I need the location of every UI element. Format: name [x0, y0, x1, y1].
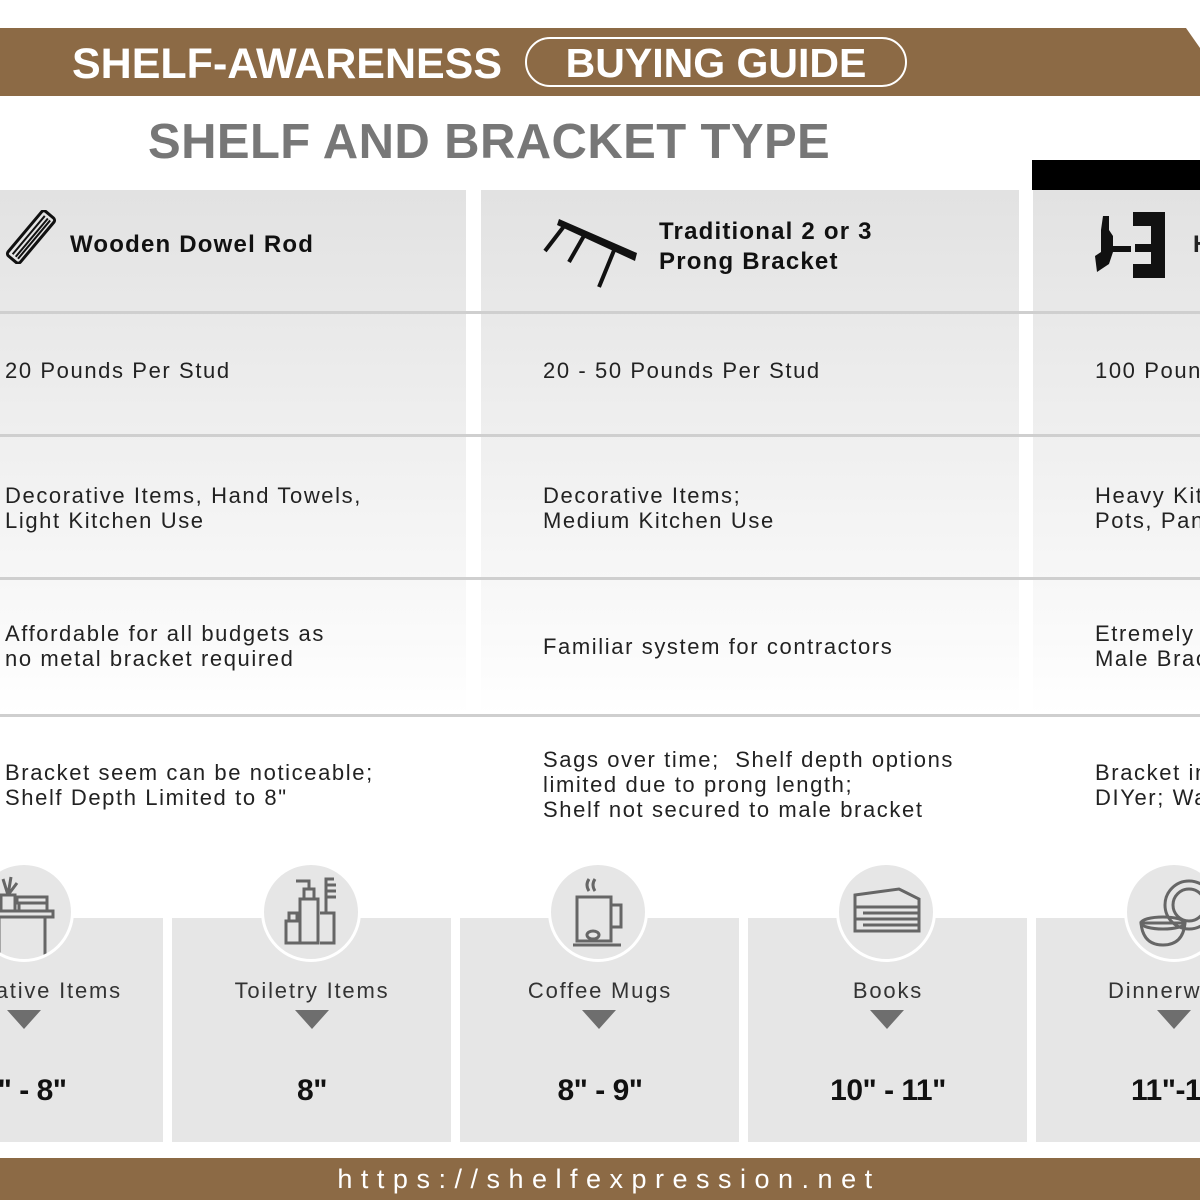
column 1: wooden dowel rod: 20 Pounds Per Stud [5, 358, 231, 383]
icon: dowel [6, 210, 56, 264]
column 1: wooden dowel rod: Shelf Depth Limited to 8" [5, 785, 288, 810]
column 2: prong bracket: Familiar system for contractors [543, 634, 893, 659]
column 2: prong bracket: Sags over time; Shelf depth options [543, 747, 954, 772]
column 2: prong bracket: Traditional 2 or 3 [659, 218, 873, 245]
icon: coffee mug [548, 862, 648, 962]
column 1: wooden dowel rod: Wooden Dowel Rod [70, 231, 314, 258]
column 1: wooden dowel rod [5, 210, 374, 810]
column 2: prong bracket: Medium Kitchen Use [543, 508, 775, 533]
label: books: Books [853, 978, 923, 1003]
column 2: prong bracket: Shelf not secured to male bracket [543, 797, 924, 822]
heading: SHELF AND BRACKET TYPE [148, 115, 830, 169]
footer band: https://shelfexpression.net [337, 1164, 881, 1194]
black bar [1032, 160, 1200, 190]
column 1: wooden dowel rod: Decorative Items, Hand Towels, [5, 483, 362, 508]
table columns background [0, 190, 466, 715]
label: coffee mugs: Coffee Mugs [528, 978, 672, 1003]
column 1: wooden dowel rod: Affordable for all budgets as [5, 621, 325, 646]
cards [0, 918, 163, 1142]
column 1: wooden dowel rod: no metal bracket required [5, 646, 294, 671]
column 2: prong bracket: 20 - 50 Pounds Per Stud [543, 358, 821, 383]
column 2: prong bracket [543, 218, 954, 822]
icon: hidden bracket [1095, 212, 1165, 278]
column 2: prong bracket: Prong Bracket [659, 248, 839, 275]
bottom labels clip container: 8" [297, 1074, 327, 1107]
column 1: wooden dowel rod: Light Kitchen Use [5, 508, 205, 533]
title: shelf-awareness: SHELF-AWARENESS [72, 40, 502, 88]
badge: buying guide: BUYING GUIDE [566, 40, 866, 86]
column 2: prong bracket: limited due to prong length; [543, 772, 853, 797]
icon: prong bracket [544, 219, 637, 288]
icon: decorative items [0, 862, 74, 962]
icon: toiletry [261, 862, 361, 962]
label: toiletry items: Toiletry Items [235, 978, 389, 1003]
header band [0, 28, 1200, 96]
footer band [0, 1158, 1200, 1200]
bottom labels clip container: 8" - 9" [558, 1074, 642, 1107]
bottom labels clip container: 10" - 11" [830, 1074, 946, 1107]
column 1: wooden dowel rod: Bracket seem can be noticeable; [5, 760, 374, 785]
icon: dinnerware [1124, 862, 1200, 962]
bottom labels clip container [0, 978, 1200, 1107]
column 2: prong bracket: Decorative Items; [543, 483, 741, 508]
icon: books [836, 862, 936, 962]
column 3: hidden bracket (cut off) [1095, 212, 1200, 810]
